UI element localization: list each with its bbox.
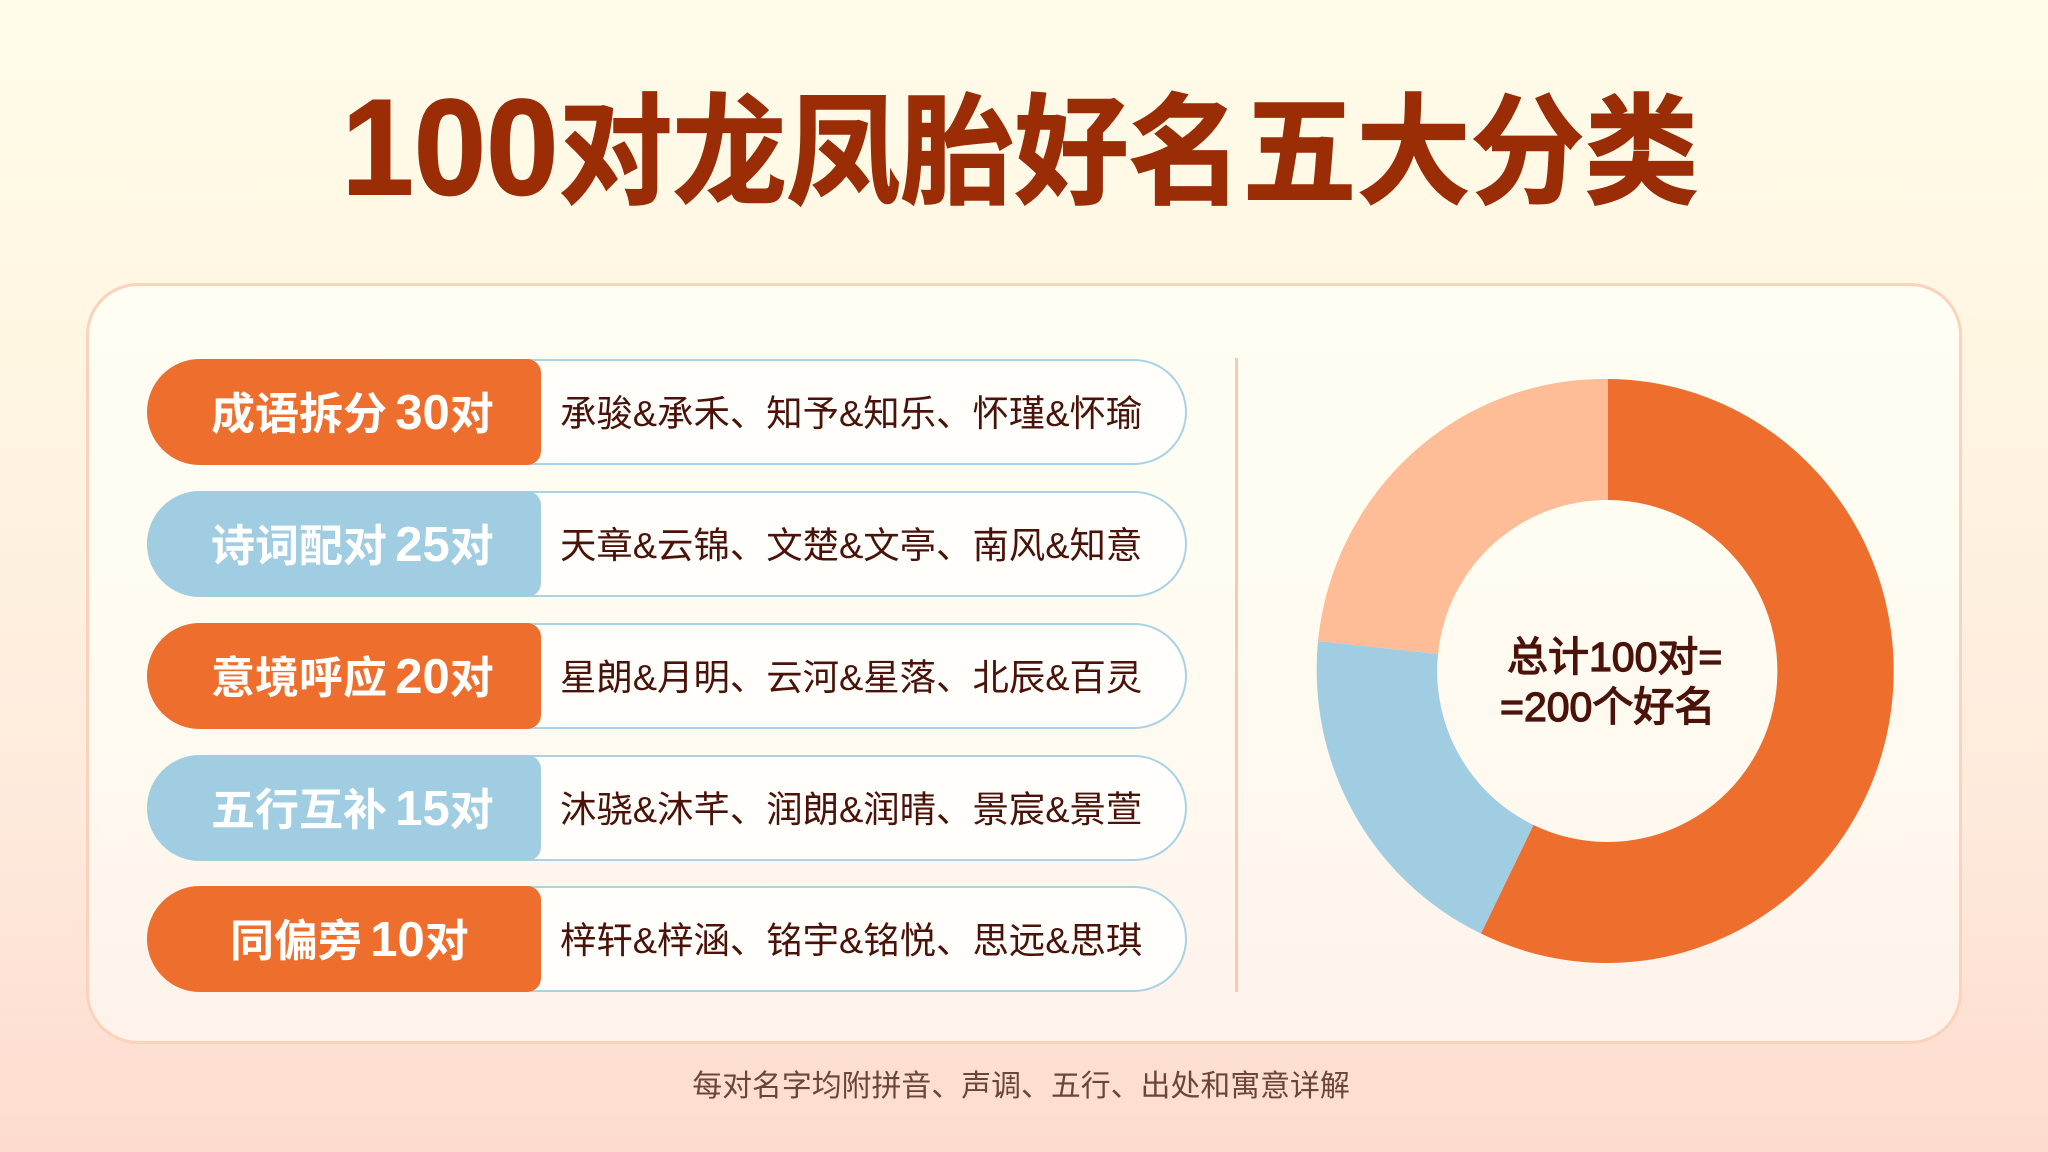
examples: 五行互补: 沐骁&沐芊、润朗&润晴、景宸&景萱 (560, 789, 1142, 830)
donut center text (1500, 634, 1722, 730)
row: 诗词配对 (147, 491, 1187, 597)
row: 同偏旁 (147, 886, 1187, 992)
label: 同偏旁 10对 (147, 886, 541, 992)
row: 意境呼应 (147, 623, 1187, 729)
label: 成语拆分 30对: 成语拆分 30对 (211, 386, 494, 440)
panel: main card (86, 283, 1962, 1044)
donut chart (1317, 379, 1894, 963)
label: 五行互补 15对 (147, 755, 541, 861)
label: 意境呼应 20对 (147, 623, 541, 729)
row: 五行互补 (147, 755, 1187, 861)
segment: orange (1481, 379, 1894, 963)
examples: 诗词配对: 天章&云锦、文楚&文亭、南风&知意 (560, 525, 1142, 566)
donut center text: =200个好名 (1500, 684, 1715, 730)
title: 100对龙凤胎好名五大分类 (342, 70, 1698, 224)
segment: blue (1317, 641, 1534, 934)
examples: 同偏旁: 梓轩&梓涵、铭宇&铭悦、思远&思琪 (560, 920, 1142, 961)
label: 诗词配对 25对 (147, 491, 541, 597)
segment: peach (1318, 379, 1608, 654)
label: 成语拆分 30对 (147, 359, 541, 465)
row: 成语拆分 (147, 359, 1187, 465)
footnote: 每对名字均附拼音、声调、五行、出处和寓意详解 (692, 1070, 1350, 1103)
label: 同偏旁 10对: 同偏旁 10对 (230, 913, 469, 967)
examples: 意境呼应: 星朗&月明、云河&星落、北辰&百灵 (560, 657, 1142, 698)
label: 五行互补 15对: 五行互补 15对 (211, 782, 494, 836)
label: 意境呼应 20对: 意境呼应 20对 (211, 650, 494, 704)
donut center text: 总计100对= (1507, 634, 1722, 680)
label: 诗词配对 25对: 诗词配对 25对 (211, 518, 494, 572)
examples: 成语拆分: 承骏&承禾、知予&知乐、怀瑾&怀瑜 (560, 393, 1142, 434)
